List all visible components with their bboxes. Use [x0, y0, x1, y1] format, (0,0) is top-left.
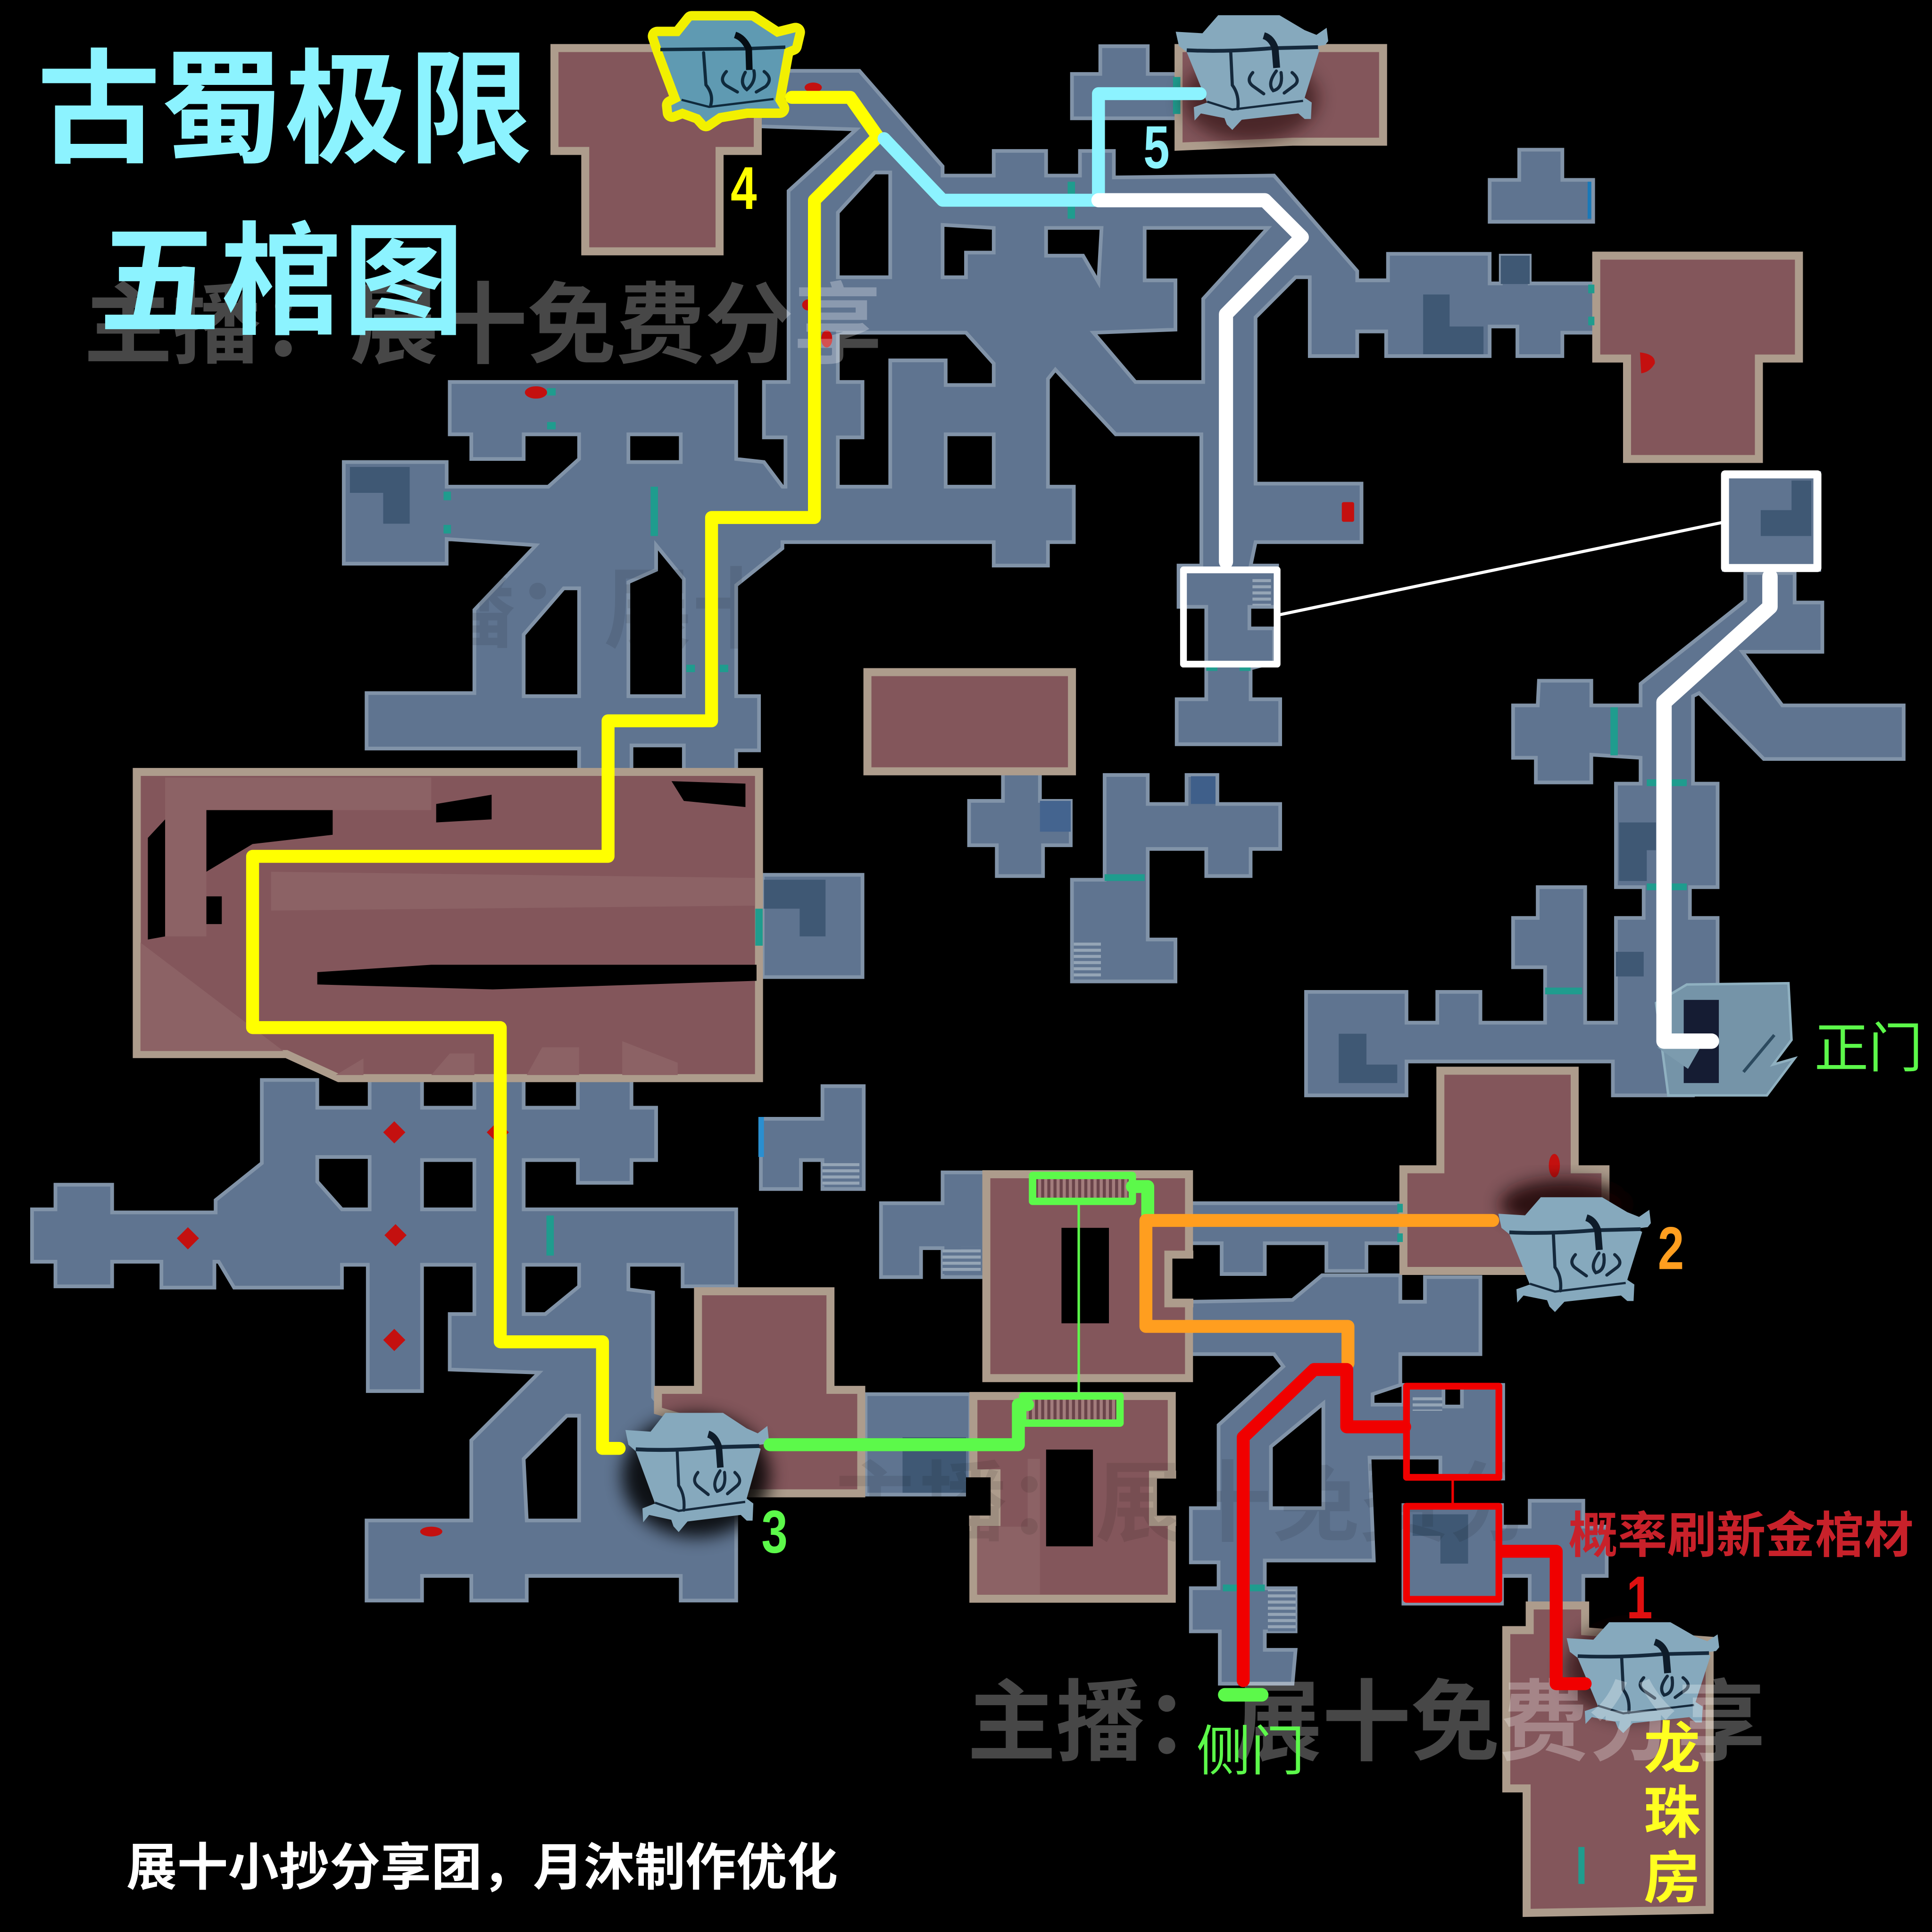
watermark: bottom: 主播：展十免费分享: [967, 1673, 1765, 1772]
label: dragon orb room: 珠: [1644, 1782, 1700, 1845]
side door marker: [1225, 1690, 1262, 1700]
numbered labels: 5: [1143, 114, 1170, 181]
route: green ladders to chest 3: [770, 1175, 1148, 1445]
label: dragon orb room: 龙: [1644, 1717, 1700, 1781]
corridor network: southwest: [32, 1080, 992, 1600]
numbered labels: 1: [1626, 1564, 1653, 1632]
credit line: 展十小抄分享团，月沐制作优化: [126, 1839, 838, 1896]
chest 2: [1499, 1180, 1651, 1312]
watermark: faint on floors: [340, 561, 1536, 1553]
chest 1: [1565, 1620, 1719, 1733]
room: chest 2 chamber: [1403, 1071, 1606, 1271]
corridor network: southeast: [1191, 1275, 1503, 1684]
room: white-boxed stair room: [1724, 473, 1819, 570]
watermark: faint on floors: 主播：展十免费分: [831, 1454, 1536, 1553]
main gate structure: [1656, 983, 1795, 1095]
label: side door: 侧门: [1196, 1721, 1305, 1782]
watermark: top: 主播：展十免费分享: [84, 276, 882, 375]
doors: [443, 77, 1687, 1884]
room: dragon-orb chamber: [1506, 1606, 1709, 1913]
room: great hall: [137, 772, 759, 1078]
room: stair room beside great hall: [763, 875, 863, 977]
room: lower ladder hall: [966, 1396, 1179, 1599]
title: [37, 41, 532, 350]
room: T room: [761, 1086, 864, 1189]
route: yellow to chest 4: [253, 97, 878, 1449]
room: chest 3 chamber: [658, 1291, 861, 1493]
numbered labels: 4: [731, 155, 757, 222]
room: chest 4 chamber: [555, 48, 758, 251]
numbered labels: 2: [1658, 1215, 1684, 1282]
route: cyan to chest 5: [884, 94, 1200, 200]
room: northeast T: [1490, 150, 1593, 222]
room: stair room by green route: [866, 1394, 970, 1495]
chest 3: [622, 1413, 770, 1537]
watermark: faint on floors: 主播：展十: [340, 561, 780, 659]
room: lower red-box room: [1403, 1501, 1607, 1604]
room: small cross by chest 5: [1072, 46, 1177, 118]
title: 古蜀极限: [37, 41, 532, 179]
room: centre hall: [867, 672, 1072, 771]
room: northeast hall: [1596, 256, 1799, 459]
label: dragon orb room: [1644, 1717, 1700, 1910]
label: chance of golden coffin: 概率刷新金棺材: [1568, 1508, 1914, 1563]
stairs and floor details: [350, 256, 1811, 1632]
room: upper ladder hall: [986, 1174, 1194, 1378]
corridor network: north: [344, 71, 1594, 773]
room: pieces below centre hall: [969, 773, 1071, 876]
title: 五棺图: [99, 214, 465, 350]
red markers: [177, 83, 1655, 1536]
label: main gate: 正门: [1815, 1018, 1923, 1079]
label: dragon orb room: 房: [1644, 1847, 1700, 1910]
room: centre corridors: [1072, 775, 1280, 982]
route: white from main gate: [1099, 200, 1817, 1041]
room: chest 5 chamber: [1179, 48, 1383, 147]
chest 5: [1176, 15, 1328, 142]
room: west stair room: [881, 1173, 992, 1277]
numbered labels: [731, 114, 1684, 1632]
corridor: between rooms: [1191, 1203, 1400, 1274]
corridor network: east: [1306, 573, 1904, 1095]
route: orange to chest 2: [1146, 1220, 1493, 1363]
chest 4: golden outline: [657, 20, 796, 122]
numbered labels: 3: [761, 1499, 788, 1566]
route: red from side door: [1243, 1370, 1585, 1684]
